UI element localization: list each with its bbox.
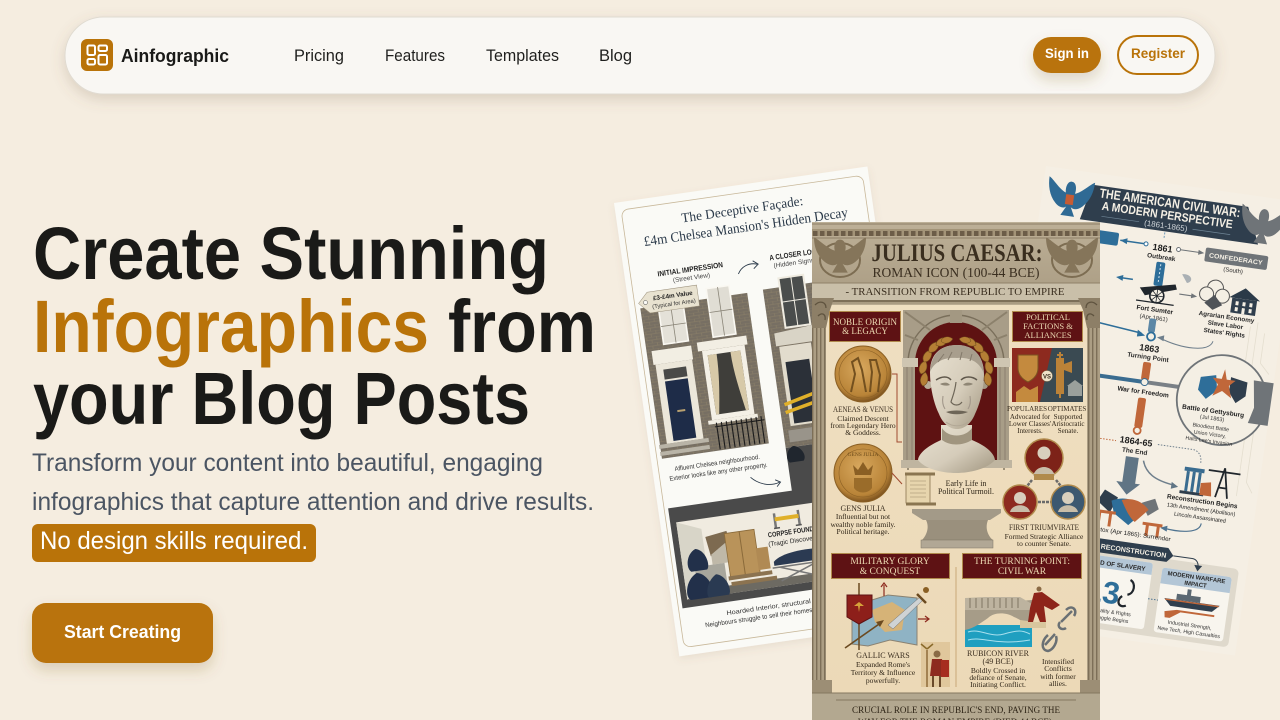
text: factions: POPULARES: [1007, 405, 1047, 413]
pedestal: [912, 509, 1001, 548]
header: noble origin: & LEGACY: [842, 326, 888, 336]
caesar figure: [1028, 586, 1060, 622]
header: turning point: [962, 554, 1082, 578]
bottom banner: CRUCIAL ROLE IN REPUBLIC'S END, PAVING THE: [852, 706, 1060, 716]
header: military glory: MILITARY GLORY: [850, 557, 930, 567]
value tag: (Typical for Area): [652, 298, 696, 311]
subtitle: [32, 449, 594, 516]
headline: your Blog Posts: [33, 357, 530, 440]
gettysburg circle: Battle of Gettysburg: [1182, 404, 1245, 419]
initial impression label: INITIAL IMPRESSION: [657, 260, 724, 278]
text: rubicon: RUBICON RIVER: [967, 649, 1030, 658]
lower window with curtains: [697, 335, 758, 425]
text: intensified: with former: [1040, 672, 1076, 681]
text: intensified: Intensified: [1042, 657, 1074, 666]
text: factions: [1007, 405, 1086, 435]
header: political factions: ALLIANCES: [1024, 330, 1072, 340]
gettysburg circle: (Jul 1863): [1199, 414, 1225, 424]
brand name: Ainfographic: [121, 45, 229, 66]
text: intensified: Conflicts: [1044, 664, 1072, 673]
card: modern warfare: [1153, 567, 1232, 642]
closer look label: [769, 243, 844, 270]
rubicon bridge: [965, 597, 1046, 647]
parchment: [826, 305, 1087, 693]
laurel wreath: [918, 335, 994, 387]
eagle right: [1237, 204, 1280, 247]
steps: [659, 438, 710, 456]
corpse found label: (Tragic Discovery): [768, 534, 821, 548]
caption: street view: [668, 453, 768, 483]
scroll: [892, 473, 936, 504]
coin: aeneas and venus: [835, 346, 891, 402]
text: early life: [938, 479, 994, 496]
register button: [1118, 36, 1198, 74]
text: aeneas and venus: Claimed Descent: [837, 414, 890, 423]
reconstruction text: Reconstruction Begins: [1167, 493, 1238, 510]
card: modern warfare: IMPACT: [1184, 581, 1207, 590]
trash bag: [786, 445, 805, 463]
populares shield: [1018, 355, 1038, 382]
text: gens julia: wealthy noble family.: [830, 520, 896, 529]
headline: [33, 212, 596, 440]
header: military glory: & CONQUEST: [860, 567, 920, 577]
navigation bar: [65, 17, 1215, 94]
header: turning point: CIVIL WAR: [998, 567, 1047, 577]
circuit pattern: [1226, 321, 1276, 498]
section tag: [1051, 532, 1204, 572]
text: factions: Aristocratic: [1051, 420, 1085, 428]
header: noble origin: NOBLE ORIGIN: [833, 317, 897, 327]
timeline 1863: [1030, 303, 1220, 443]
start creating button: [32, 603, 213, 663]
text: gens julia: [830, 504, 896, 536]
header: political factions: [1012, 312, 1082, 342]
connector line: [892, 374, 902, 442]
gettysburg circle: [1171, 349, 1277, 453]
subtitle: Transform your content into beautiful, engaging: [32, 449, 543, 477]
eagle left: [1044, 176, 1095, 219]
reconstruction icon: [1179, 462, 1241, 501]
nav links: [294, 46, 632, 65]
railing: [714, 416, 768, 450]
impact container: [1066, 546, 1239, 647]
timeline 1863: Turning Point: [1127, 351, 1170, 364]
timeline 1861: Outbreak: [1147, 252, 1176, 263]
text: first triumvirate: [1005, 523, 1084, 548]
fasces: [1056, 352, 1083, 398]
text: rubicon: Initiating Conflict.: [970, 680, 1026, 689]
corpse found label: [767, 525, 821, 548]
caesar title: [846, 240, 1065, 298]
caption: interior: [703, 594, 840, 629]
gettysburg circle: Union Victory,: [1193, 429, 1226, 440]
value tag: £3-£4m Value: [653, 290, 694, 302]
stone header: [812, 222, 1100, 304]
text: gens julia: GENS JULIA: [840, 504, 886, 513]
triumvirate medallions: [1003, 439, 1085, 519]
closer look label: A CLOSER LOOK: [769, 246, 822, 262]
card: end of slavery: 13: [1083, 572, 1122, 611]
header: political factions: POLITICAL: [1026, 312, 1070, 322]
barrier icon: [772, 510, 802, 528]
headline: Create Stunning: [33, 212, 549, 295]
header: military glory: [832, 554, 950, 578]
text: rubicon: (49 BCE): [983, 657, 1014, 666]
poster title: The Deceptive Façade:: [680, 193, 804, 225]
poster title: [640, 187, 849, 250]
nav links: Blog: [599, 46, 632, 65]
text: factions: Lower Classes': [1009, 420, 1051, 428]
initial impression label: [657, 260, 725, 286]
section tag: WAR'S END & RECONSTRUCTION: [1052, 537, 1167, 560]
timeline 1861: 1861: [1152, 242, 1173, 255]
text: rubicon: defiance of Senate,: [969, 673, 1027, 682]
text: early life: Early Life in: [946, 479, 986, 488]
coin: gens julia: GENS JULIA: [847, 452, 879, 458]
text: aeneas and venus: AENEAS & VENUS: [833, 405, 893, 414]
headline: Infographics: [33, 285, 429, 368]
text: gens julia: Political heritage.: [837, 527, 890, 536]
poster header: [1080, 183, 1263, 245]
text: factions: Senate.: [1058, 427, 1078, 435]
text: gallic wars: Expanded Rome's: [856, 660, 910, 669]
card: end of slavery: Equality & Rights: [1090, 607, 1131, 618]
timeline 1864-65: [1081, 430, 1203, 504]
confederacy pill: (South): [1223, 267, 1243, 276]
text: aeneas and venus: & Goddess.: [845, 428, 881, 437]
roman soldier card: [921, 642, 950, 687]
cannon: fort sumter: (Apr 1861): [1139, 314, 1168, 324]
facade: decay: [762, 264, 900, 448]
eagle reliefs: [814, 237, 1098, 277]
reconstruction text: Lincoln Assassinated: [1174, 512, 1226, 525]
vs badge: VS: [1043, 374, 1051, 380]
poster header: THE AMERICAN CIVIL WAR:: [1099, 185, 1241, 220]
niche arch: [901, 310, 1012, 470]
cotton and plantation: [1198, 278, 1262, 316]
curved arrow: [737, 260, 759, 274]
nav links: Pricing: [294, 46, 344, 65]
highlight: no design skills: No design skills required.: [40, 527, 308, 555]
caesar title: ROMAN ICON (100-44 BCE): [872, 266, 1040, 281]
sign in button: [1033, 37, 1101, 73]
agrarian text: Agrarian Economy: [1198, 310, 1255, 325]
nav links: Templates: [486, 46, 559, 65]
closer look label: (Hidden Signs of Decay): [773, 253, 844, 270]
curved arrow: [1160, 518, 1201, 536]
cannon: fort sumter: [1111, 265, 1200, 327]
text: early life: Political Turmoil.: [938, 487, 994, 496]
card: end of slavery: [1072, 553, 1153, 629]
coin: gens julia: [834, 444, 892, 502]
vs panel: [1012, 348, 1083, 402]
text: aeneas and venus: from Legendary Hero: [830, 421, 896, 430]
facade: street view: [638, 283, 769, 459]
text: gens julia: Influential but not: [836, 512, 891, 521]
timeline 1863: 1863: [1139, 342, 1160, 355]
upper windows: [657, 285, 736, 344]
agrarian text: [1196, 310, 1255, 341]
poster header: (1861-1865): [1144, 218, 1188, 234]
confederacy pill: CONFEDERACY: [1208, 252, 1264, 267]
text: rubicon: [967, 649, 1030, 689]
value tag: [637, 285, 700, 314]
reconstruction text: Appomattox (Apr 1865): Surrender: [1075, 524, 1171, 543]
cannon: fort sumter: Fort Sumter: [1136, 304, 1174, 316]
poster: chelsea mansion (left): [614, 166, 933, 656]
card: modern warfare: Industrial Strength,: [1167, 620, 1212, 632]
reconstruction text: 13th Amendment (Abolition): [1166, 502, 1236, 518]
dark interior frame: [662, 432, 920, 608]
columns: [812, 298, 1100, 693]
handshake icon: [1093, 489, 1166, 538]
caesar title: JULIUS CAESAR:: [872, 240, 1042, 267]
confederacy pill: [1203, 247, 1269, 279]
card: modern warfare: MODERN WARFARE: [1167, 571, 1226, 585]
gettysburg circle: Bloodiest Battle: [1192, 422, 1229, 433]
register button: Register: [1131, 46, 1186, 61]
timeline 1864-65: The End: [1121, 447, 1148, 457]
card: end of slavery: Struggle Begins: [1091, 614, 1129, 625]
headline: from: [448, 285, 596, 368]
timeline 1864-65: 1864-65: [1119, 434, 1153, 449]
text: factions: OPTIMATES: [1048, 405, 1086, 413]
text: gallic wars: GALLIC WARS: [856, 651, 910, 660]
text: factions: Interests.: [1017, 427, 1043, 435]
dotted arrow: [1148, 599, 1158, 600]
reconstruction text: [1075, 481, 1238, 552]
union pill: [1056, 224, 1119, 246]
text: first triumvirate: Formed Strategic Alliance: [1005, 532, 1084, 541]
card: end of slavery: END OF SLAVERY: [1091, 558, 1147, 573]
poster title: £4m Chelsea Mansion's Hidden Decay: [643, 206, 849, 250]
header: noble origin: [830, 312, 900, 342]
agrarian text: Slave Labor: [1207, 319, 1244, 331]
text: rubicon: Boldly Crossed in: [971, 666, 1025, 675]
map with sword and banner: [845, 583, 929, 650]
logo icon: [81, 39, 113, 71]
caesar title: - TRANSITION FROM REPUBLIC TO EMPIRE: [846, 286, 1065, 298]
poster: civil war (right): [981, 166, 1280, 656]
broken chain: [1043, 608, 1075, 651]
curved arrow 2: [751, 473, 781, 490]
text: factions: Supported: [1054, 413, 1083, 421]
caption: interior: Hoarded Interior, structural neglect.: [726, 594, 838, 617]
poster header: A MODERN PERSPECTIVE: [1101, 199, 1234, 231]
text: intensified: allies.: [1049, 679, 1067, 688]
agrarian text: States' Rights: [1203, 327, 1246, 340]
text: first triumvirate: FIRST TRIUMVIRATE: [1009, 523, 1079, 532]
timeline 1863: War for Freedom: [1117, 385, 1169, 400]
text: gallic wars: powerfully.: [866, 676, 900, 685]
nav links: Features: [385, 46, 445, 65]
inner border: [621, 175, 926, 648]
subtitle: infographics that capture attention and drive results.: [32, 488, 594, 516]
door: [652, 345, 705, 444]
header: political factions: FACTIONS &: [1023, 321, 1073, 331]
caption: street view: Affluent Chelsea neighbourhood.: [674, 454, 760, 473]
initial impression label: (Street View): [672, 272, 711, 284]
bust of caesar: [918, 345, 995, 473]
bottom banner: [812, 693, 1100, 720]
card: modern warfare: New Tech, High Casualties: [1157, 625, 1221, 640]
sign in button: Sign in: [1045, 46, 1089, 61]
caption: street view: Exterior looks like any other property.: [669, 462, 768, 483]
header: turning point: THE TURNING POINT:: [974, 557, 1070, 567]
text: gallic wars: [851, 651, 916, 685]
corpse found label: CORPSE FOUND: [768, 526, 814, 539]
text: intensified: [1040, 657, 1076, 688]
text: aeneas and venus: [830, 405, 896, 437]
poster: julius caesar (centre): [812, 222, 1100, 720]
text: first triumvirate: to counter Senate.: [1017, 539, 1071, 548]
gettysburg circle: Halts Lee's Invasion: [1185, 435, 1233, 448]
caption: interior: Neighbours struggle to sell their homes.: [705, 607, 815, 629]
start creating button: Start Creating: [64, 621, 181, 642]
timeline 1861: [1115, 226, 1206, 292]
interior scene: [676, 489, 919, 601]
text: gallic wars: Territory & Influence: [851, 668, 916, 677]
text: factions: Advocated for: [1010, 413, 1051, 421]
